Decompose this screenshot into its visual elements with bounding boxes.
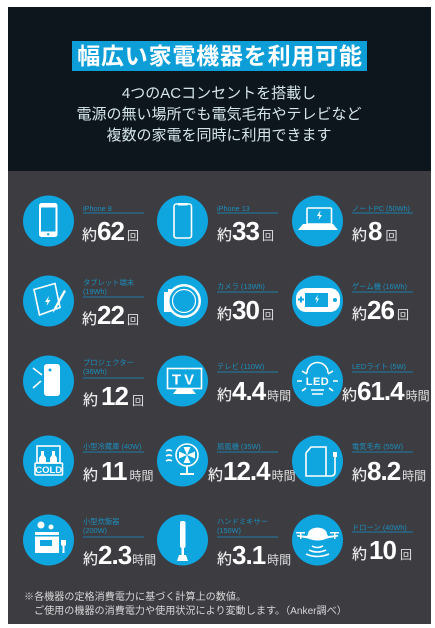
item: small refrigerator: 約11時間 (83, 456, 154, 486)
item: small rice cooker (23, 514, 156, 570)
item: tablet: 約22回 (82, 300, 139, 330)
intro text: 電源の無い場所でも電気毛布やテレビなど (76, 106, 362, 123)
item: electric blanket (292, 436, 426, 486)
item: iPhone 13 (157, 196, 278, 246)
item: projector (23, 356, 144, 411)
item: iPhone 8: iPhone 8 (83, 204, 112, 213)
icon: tablet and pen (23, 276, 74, 326)
item: electric blanket: 約8.2時間 (352, 456, 426, 486)
footnote: ※各機器の定格消費電力に基づく計算上の数値。 (24, 590, 246, 603)
intro text (76, 85, 362, 144)
icon: iPhone 13 (157, 196, 208, 246)
panel: header background (8, 7, 431, 171)
item: small rice cooker: 小型炊飯器 (83, 517, 120, 526)
item: camera (157, 276, 278, 326)
title: 幅広い家電機器を利用可能 (77, 43, 363, 69)
icon: hand mixer (157, 514, 208, 566)
item: iPhone 8 (23, 196, 144, 246)
item: game console: 約26回 (352, 295, 409, 325)
panel: device list background (8, 171, 431, 624)
footnote: ご使用の機器の消費電力や使用状況により変動します。（Anker調べ） (34, 604, 347, 617)
item: tablet (23, 276, 144, 330)
item: notebook PC: ノートPC (50Wh) (352, 204, 410, 213)
icon: iPhone 8 (23, 196, 74, 246)
icon: cold box: COLD (35, 465, 62, 476)
item: tablet: (19Wh) (83, 287, 107, 296)
icon: handheld game (292, 276, 343, 326)
icon: drone (292, 514, 343, 566)
item: LED light: 約61.4時間 (342, 376, 430, 406)
intro text: 複数の家電を同時に利用できます (106, 127, 332, 144)
item: LED light (292, 356, 430, 406)
icon: TV: TV (172, 372, 197, 388)
intro text: 4つのACコンセントを搭載し (122, 85, 316, 102)
item: iPhone 13: 約33回 (217, 216, 274, 246)
item: electric fan (157, 436, 296, 486)
item: TV (157, 356, 291, 406)
item: small refrigerator (23, 436, 154, 486)
item: LED light: LEDライト (5W) (352, 362, 406, 371)
item: notebook PC: 約8 回 (352, 216, 398, 246)
item: projector: プロジェクター (83, 358, 134, 367)
item: tablet: タブレット端末 (83, 278, 135, 287)
item: hand mixer (157, 514, 291, 570)
item: hand mixer: (150W) (217, 526, 241, 535)
item: drone: 約10 回 (352, 535, 412, 565)
item: projector: (36Wh) (83, 367, 107, 376)
item: small rice cooker: (200W) (83, 526, 107, 535)
item: iPhone 8: 約62回 (82, 216, 139, 246)
item: small refrigerator: 小型冷蔵庫 (40W) (83, 442, 141, 451)
item: electric blanket: 電気毛布 (55W) (352, 442, 403, 451)
item: electric fan: 約12.4時間 (208, 456, 296, 486)
item: drone: ドローン (40Wh) (352, 523, 407, 532)
item: camera: 約30回 (217, 295, 274, 325)
item: notebook PC (292, 196, 413, 246)
item: small rice cooker: 約2.3時間 (83, 540, 156, 570)
footnote (24, 590, 347, 617)
item: iPhone 13: iPhone 13 (217, 204, 250, 213)
item: hand mixer: 約3.1時間 (217, 540, 291, 570)
item: projector: 約12 回 (83, 381, 144, 411)
icon: projector (23, 356, 74, 406)
icon: fan (157, 436, 208, 486)
icon: rice cooker (23, 514, 74, 566)
item: hand mixer: ハンドミキサー (217, 517, 268, 526)
icon: laptop (292, 196, 343, 246)
icon: camera (157, 276, 208, 326)
icon: LED bulb: LED (306, 376, 329, 388)
item: drone (292, 514, 413, 566)
item: game console: ゲーム機 (16Wh) (352, 282, 407, 291)
icon: blanket (292, 436, 343, 486)
item: camera: カメラ (13Wh) (217, 282, 265, 291)
item: game console (292, 276, 413, 326)
item: TV: 約4.4時間 (217, 376, 291, 406)
item: TV: テレビ (110W) (217, 362, 264, 371)
item: electric fan: 扇風機 (35W) (217, 442, 261, 451)
